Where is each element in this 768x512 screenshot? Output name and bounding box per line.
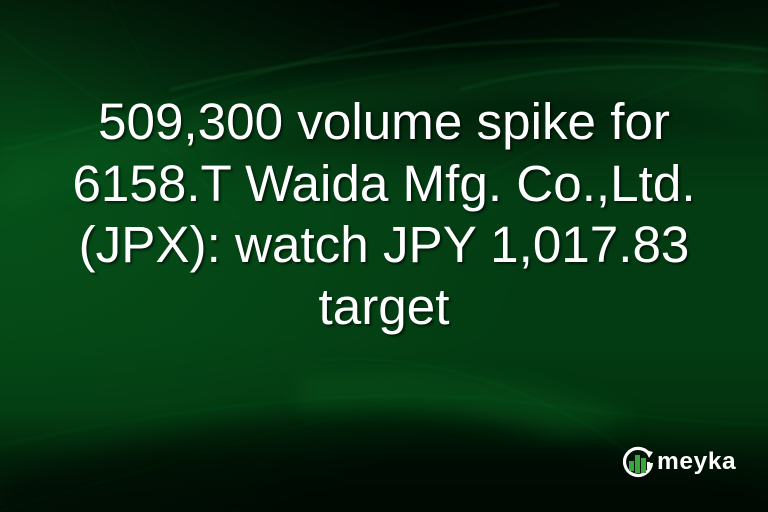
title — [72, 93, 696, 338]
title: (JPX): watch JPY 1,017.83 — [79, 216, 689, 273]
wordmark: meyka — [657, 448, 736, 475]
logo: meyka — [622, 446, 736, 478]
title: target — [319, 278, 449, 335]
icon: circular arrow with green bars — [622, 446, 654, 478]
title: 509,300 volume spike for — [98, 93, 670, 150]
title: 6158.T Waida Mfg. Co.,Ltd. — [72, 155, 696, 212]
